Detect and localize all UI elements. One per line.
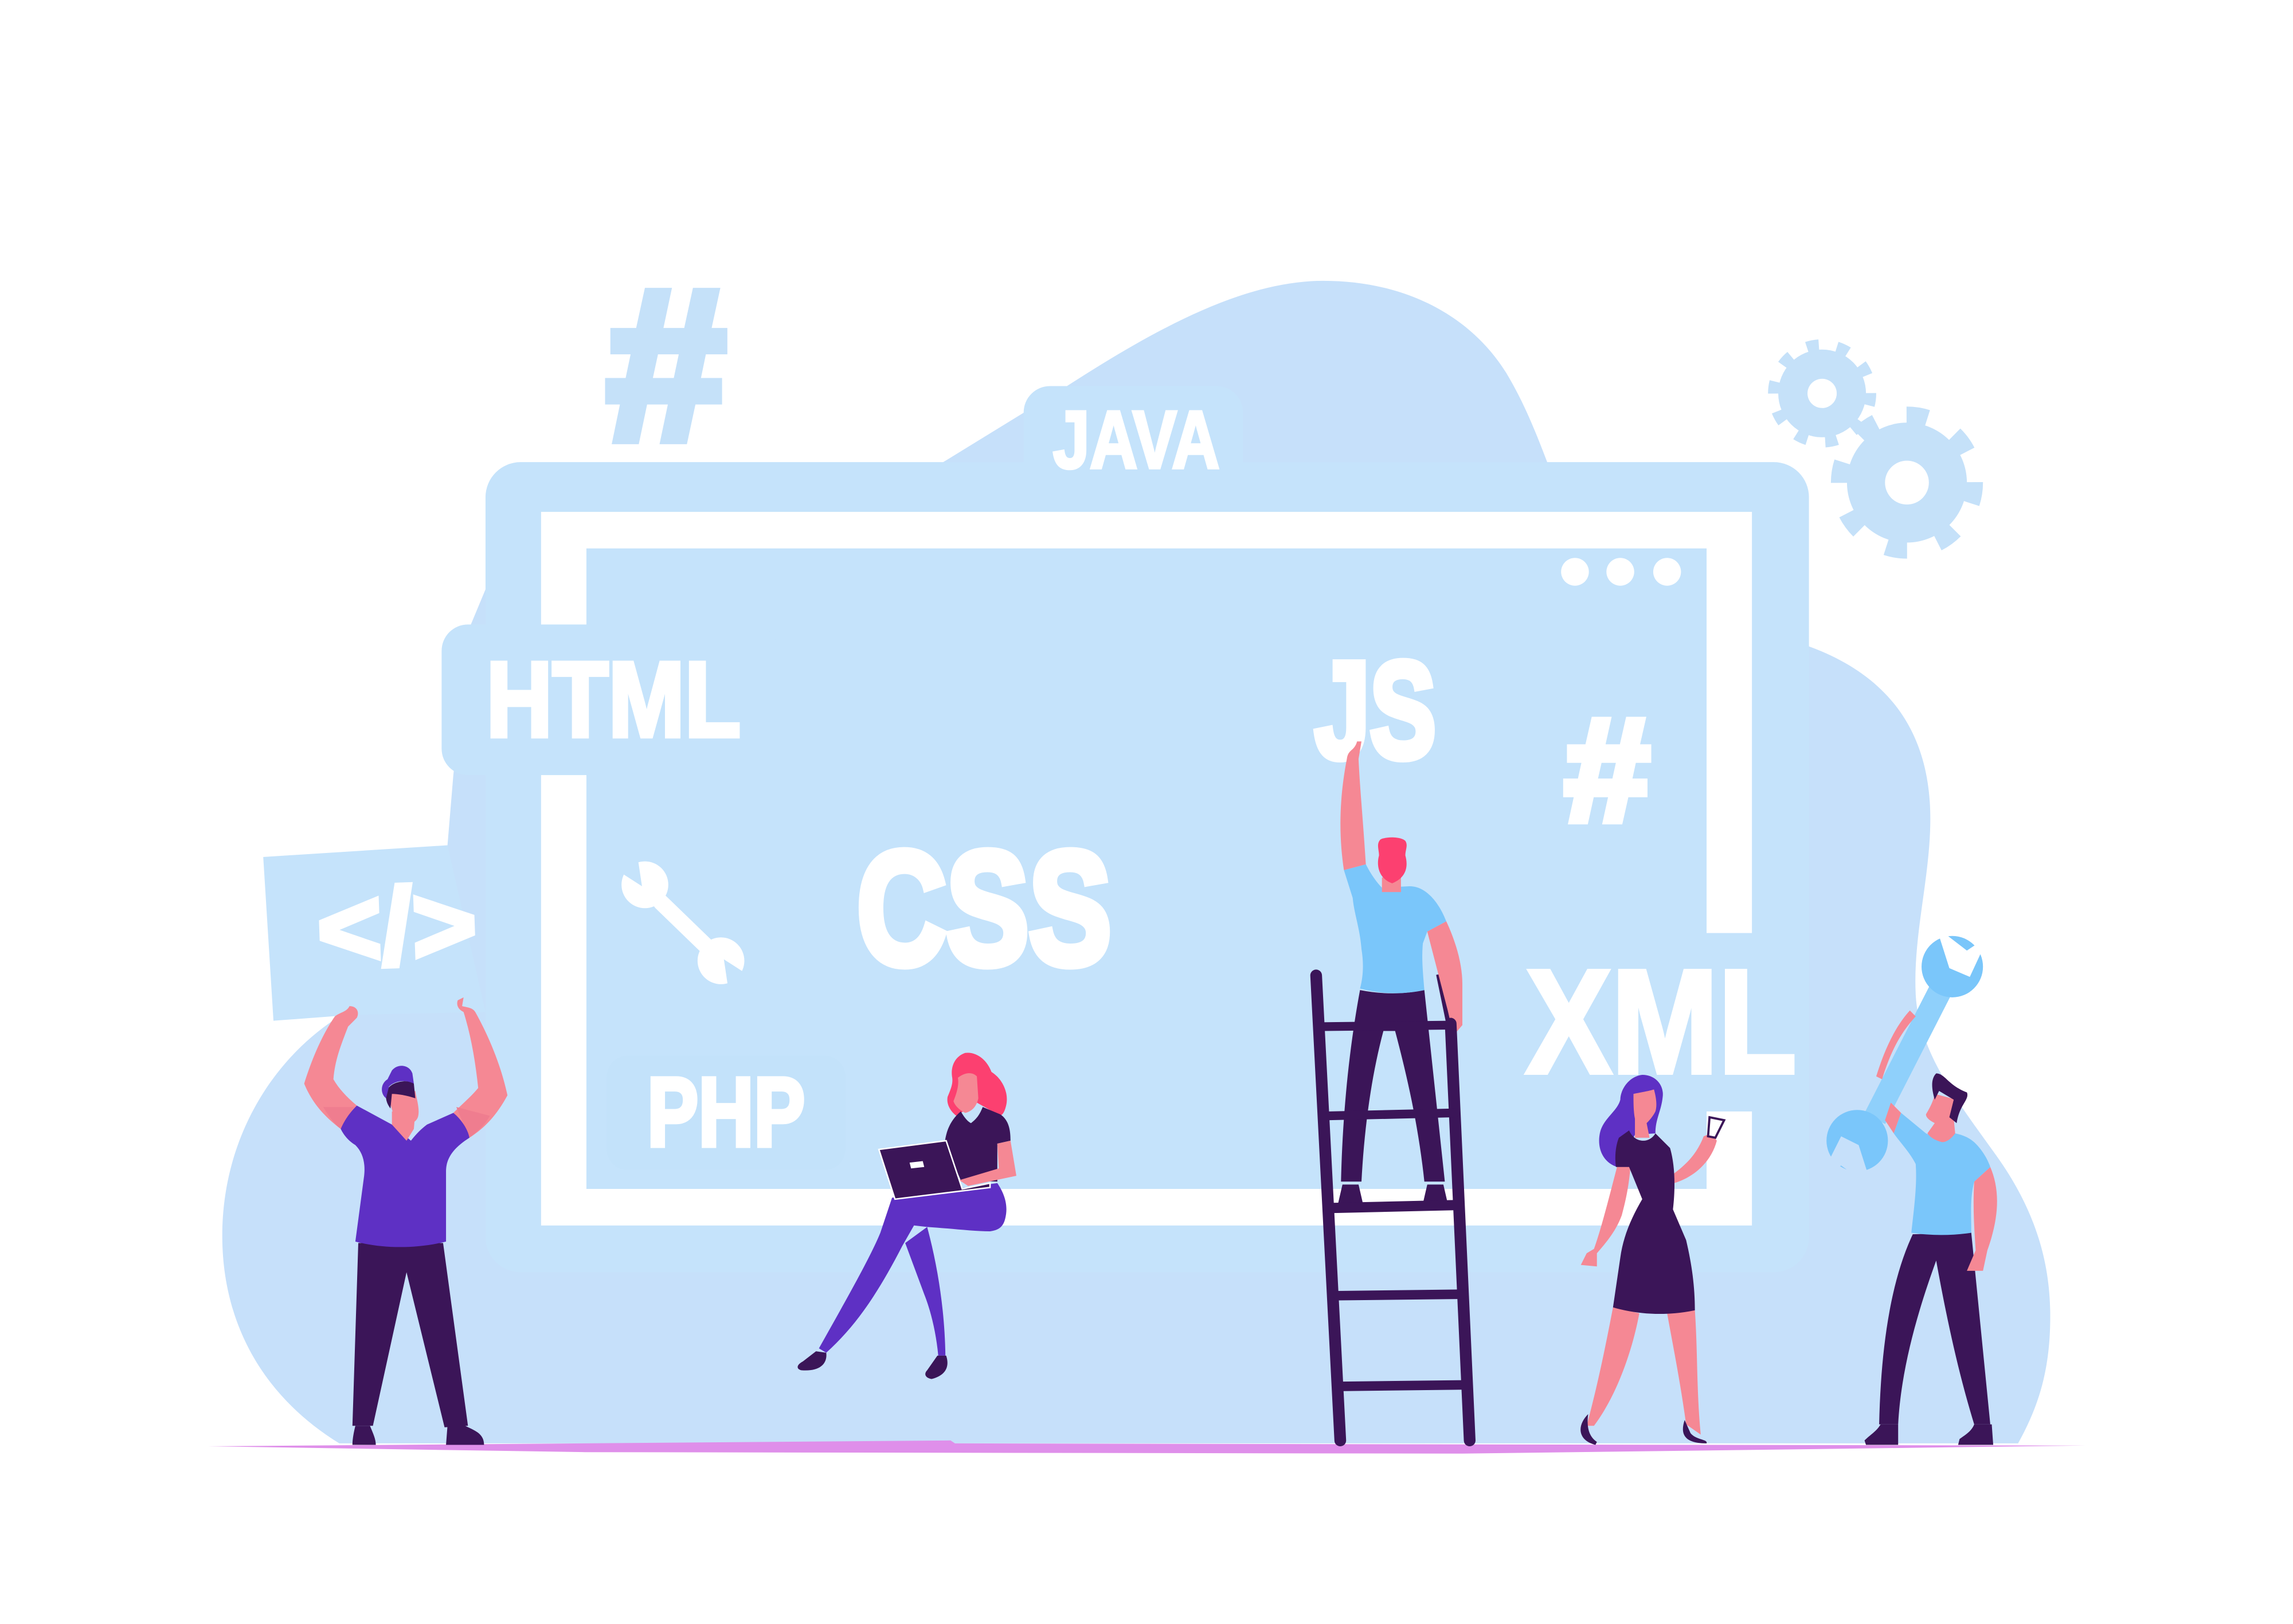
face — [1633, 1090, 1656, 1138]
seated pants — [819, 1183, 1007, 1353]
browser window — [486, 462, 1809, 1272]
figure: man lifting sign — [304, 997, 507, 1445]
large floating hash symbol: # — [607, 245, 725, 484]
figure: man on ladder — [1316, 741, 1470, 1441]
pants — [1879, 1233, 1990, 1425]
right arm — [1967, 1167, 1997, 1271]
XML badge — [1477, 933, 1809, 1112]
JAVA label: JAVA — [1053, 394, 1220, 486]
HTML badge — [441, 624, 778, 775]
upper arm — [1885, 1103, 1901, 1133]
code symbol text: </> — [315, 863, 479, 990]
big wrench — [1821, 936, 1989, 1177]
raised forearm — [1876, 1011, 1916, 1079]
icon: white wrench — [621, 857, 744, 989]
hair — [386, 1081, 415, 1109]
right arm — [1673, 1133, 1717, 1183]
ladder — [1316, 976, 1470, 1441]
window control dots — [1561, 558, 1681, 586]
left arm — [1581, 1165, 1630, 1266]
ground line — [208, 1441, 2085, 1454]
figure: woman with laptop — [797, 1053, 1016, 1379]
background blob — [222, 281, 2051, 1443]
shirt — [341, 1106, 469, 1247]
laptop logo — [910, 1161, 924, 1168]
dress — [1613, 1130, 1695, 1314]
top — [945, 1107, 1011, 1181]
shoes — [1338, 1184, 1448, 1204]
hash symbol in window: # — [1565, 688, 1650, 852]
icon: small gear — [1775, 347, 1869, 440]
neck and head — [392, 1112, 415, 1141]
JAVA badge — [1024, 386, 1243, 503]
hair — [1932, 1073, 1967, 1123]
white window frame — [541, 512, 1752, 1226]
arm — [959, 1141, 1016, 1186]
code sign panel — [263, 846, 486, 1021]
shirt — [1894, 1113, 1990, 1235]
pants — [1341, 990, 1445, 1181]
face — [1926, 1094, 1957, 1142]
face — [953, 1073, 979, 1113]
shirt — [1344, 864, 1446, 993]
ladder far rail — [1441, 974, 1451, 1024]
pants — [353, 1243, 468, 1427]
shoes — [353, 1426, 484, 1445]
CSS label: CSS — [857, 819, 1112, 998]
hair — [1599, 1075, 1663, 1167]
neck — [1382, 878, 1401, 892]
raised arm — [1340, 741, 1366, 870]
icon: large gear — [1842, 418, 1971, 547]
JS label: JS — [1314, 633, 1436, 786]
shoes — [1580, 1414, 1707, 1445]
red hair — [1378, 838, 1407, 883]
laptop — [879, 1141, 990, 1199]
shoes — [1865, 1425, 1993, 1445]
other arm — [1427, 921, 1462, 1035]
window inner screen — [586, 549, 1707, 1189]
back leg — [905, 1227, 945, 1356]
XML label: XML — [1526, 939, 1797, 1104]
figure: man holding wrench — [1821, 936, 1997, 1445]
phone — [1708, 1117, 1724, 1138]
legs — [1587, 1308, 1701, 1435]
hair — [948, 1053, 1007, 1116]
PHP badge — [607, 1056, 845, 1170]
arms — [304, 997, 507, 1138]
shoes — [797, 1351, 948, 1379]
PHP label: PHP — [647, 1058, 805, 1167]
sleeve shading — [323, 1107, 490, 1138]
HTML label: HTML — [486, 640, 741, 759]
figure: woman with phone — [1580, 1075, 1724, 1445]
